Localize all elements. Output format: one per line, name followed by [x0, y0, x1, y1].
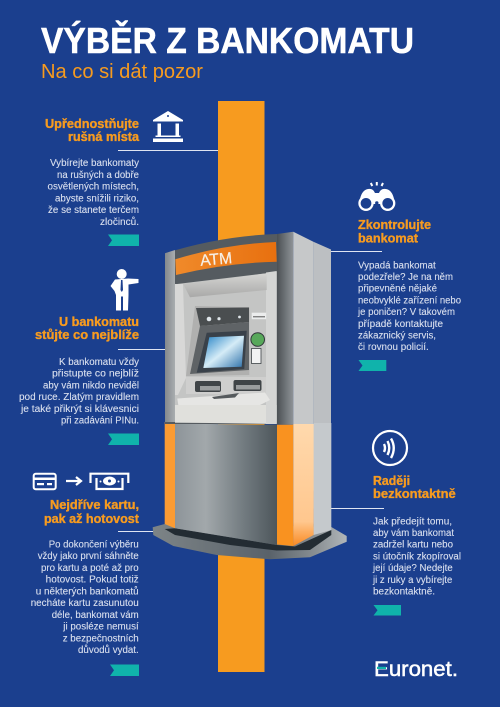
text block: ji posléze nemusí	[62, 622, 139, 632]
teal ribbon	[108, 234, 139, 246]
text block: či rovnou policií.	[358, 342, 429, 353]
panel: stand close	[19, 269, 139, 445]
ATM side faces	[277, 232, 331, 535]
text block: necháte kartu zasunutou	[31, 598, 139, 609]
text block: zločinců.	[100, 216, 139, 228]
text block: abyste snížili riziko,	[55, 193, 139, 204]
text block: že se stanete terčem	[48, 205, 139, 216]
ATM orange sign	[175, 242, 277, 275]
panel: busy places	[45, 111, 183, 246]
text block: zadržel kartu nebo	[373, 540, 453, 551]
text block: případě kontaktujte	[358, 319, 443, 330]
text block: Vypadá bankomat	[358, 260, 436, 271]
text block: ji z ruky a vybírejte	[372, 575, 453, 586]
heading: pak až hotovost	[44, 512, 140, 526]
subtitle: Na co si dát pozor	[41, 61, 203, 83]
heading	[45, 117, 140, 144]
text block: při zadávání PINu.	[61, 416, 139, 426]
ATM screen	[197, 331, 247, 373]
heading: Zkontrolujte	[358, 218, 431, 232]
text block: na rušných a dobře	[57, 170, 139, 181]
heading	[44, 498, 140, 526]
text block: hotovost. Pokud totiž	[46, 574, 139, 586]
icon: pointing man	[110, 269, 138, 310]
text block: aby vám nikdo neviděl	[43, 380, 139, 391]
text block: důvodů vydat.	[78, 644, 139, 656]
text block: osvětlených místech,	[48, 182, 139, 193]
text block	[357, 260, 461, 353]
text block: je poničen? V takovém	[357, 307, 455, 318]
orange vertical bar	[218, 101, 264, 672]
ATM card slot and sensors	[207, 313, 266, 321]
ATM machine	[153, 232, 347, 559]
text block: bezkontaktně.	[373, 586, 435, 598]
text block: podezřele? Je na něm	[358, 272, 453, 283]
ATM orange sign: ATM	[199, 250, 233, 270]
ATM cash slots and shelf	[177, 377, 270, 405]
panel: card first	[31, 474, 140, 676]
heading: bankomat	[358, 232, 419, 246]
text block: pro kartu a poté až pro	[41, 563, 139, 574]
heading: rušná místa	[68, 130, 140, 144]
heading: Nejdříve kartu,	[50, 498, 139, 512]
title: VÝBĚR Z BANKOMATU	[41, 19, 414, 61]
ATM base plinth	[153, 524, 347, 559]
heading: Raději	[373, 474, 410, 488]
heading	[373, 474, 456, 501]
panel: check the ATM	[357, 182, 461, 371]
text block: přistupte co nejblíž	[52, 369, 139, 380]
teal ribbon	[108, 434, 139, 445]
icon: contactless	[373, 431, 407, 465]
text block	[31, 539, 139, 656]
icon: bank	[153, 111, 183, 142]
text block	[19, 357, 139, 426]
heading: stůjte co nejblíže	[35, 328, 139, 342]
text block: vždy jako první sáhněte	[38, 551, 139, 562]
ATM lower orange panels	[165, 422, 314, 546]
heading	[358, 218, 431, 246]
text block: zákaznický servis,	[358, 330, 436, 342]
text block: je také přikrýt si klávesnici	[20, 404, 139, 415]
text block: Jak předejít tomu,	[373, 516, 452, 527]
text block: pod ruce. Zlatým pravidlem	[19, 392, 139, 403]
text block: déle, bankomat vám	[52, 610, 139, 621]
text block: její údaje? Nedejte	[372, 563, 453, 574]
teal ribbon	[358, 360, 386, 371]
ATM hood and bezel	[183, 273, 267, 376]
logo: Euronet: Euronet.	[374, 657, 458, 681]
text block: Po dokončení výběru	[49, 539, 139, 550]
heading: bezkontaktně	[373, 487, 456, 501]
heading: U bankomatu	[59, 315, 139, 329]
icon: binoculars	[360, 182, 394, 210]
icon: card, arrow, cash	[34, 474, 128, 489]
text block: Vybírejte bankomaty	[50, 158, 139, 169]
text block	[48, 158, 139, 228]
text block: aby vám bankomat	[373, 528, 454, 539]
text block: u některých bankomatů	[36, 585, 139, 597]
connector lines	[118, 150, 384, 532]
panel: contactless	[372, 431, 461, 616]
text block: připevněné nějaké	[358, 284, 437, 295]
ATM lower safe panel	[175, 423, 277, 545]
heading	[35, 315, 139, 342]
text block	[372, 516, 461, 598]
text block: neobvyklé zařízení nebo	[358, 295, 461, 306]
teal ribbon	[374, 605, 401, 616]
ATM green pad and receipt	[251, 333, 264, 364]
ATM front body	[165, 234, 277, 424]
text block: z bezpečnostních	[63, 633, 139, 644]
text block: si útočník zkopíroval	[373, 551, 461, 562]
heading: Upřednostňujte	[45, 117, 139, 131]
teal ribbon	[110, 664, 139, 676]
text block: K bankomatu vždy	[59, 357, 139, 368]
